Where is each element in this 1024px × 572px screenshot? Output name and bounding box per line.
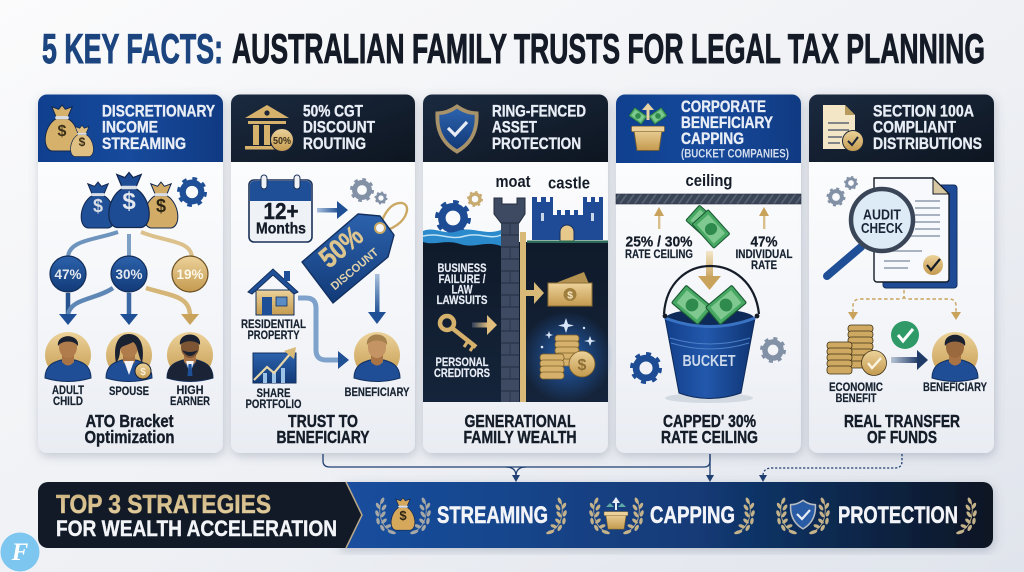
text: personal creditors: CREDITORS xyxy=(434,366,490,380)
icon: header money bags xyxy=(45,105,93,157)
icon: shield xyxy=(437,106,477,152)
text: 25% / 30% rate ceiling xyxy=(625,234,693,261)
icon: share portfolio chart xyxy=(253,347,296,383)
text: 25% / 30% rate ceiling: RATE CEILING xyxy=(625,247,693,261)
label: economic benefit: ECONOMIC xyxy=(829,380,883,394)
rate badge: 19% xyxy=(172,256,208,292)
panel: section 100A compliant distributions xyxy=(809,94,994,453)
rate badge: 47%: 47% xyxy=(54,266,82,282)
icon: 50% discount tag: 50% xyxy=(313,220,369,274)
heading: discretionary income streaming xyxy=(102,102,216,153)
logo badge: F xyxy=(11,539,29,566)
ceiling bar xyxy=(616,194,801,204)
arrow: key to wall xyxy=(472,315,497,335)
arrow: benefit to beneficiary xyxy=(891,350,928,370)
caption xyxy=(464,411,576,447)
icon: gears xyxy=(828,177,857,205)
labels: moat and castle: castle xyxy=(548,174,590,192)
icon: gold banknote: $ xyxy=(567,290,573,302)
label: economic benefit xyxy=(829,380,883,405)
icon: pot with money xyxy=(629,103,667,150)
heading: corporate beneficiary capping xyxy=(681,97,789,160)
caption: Optimization xyxy=(84,427,174,447)
label: residential property xyxy=(241,317,306,342)
caption: OF FUNDS xyxy=(867,427,937,447)
title: 5 KEY FACTS: xyxy=(42,25,223,72)
flow arrows from rates to people xyxy=(59,288,199,325)
icon: gears xyxy=(632,339,784,382)
arrow: property to beneficiary xyxy=(298,298,349,369)
water: moat xyxy=(423,230,501,246)
icon: header money bags: $ xyxy=(79,135,86,149)
text: 47% individual rate: RATE xyxy=(751,258,777,272)
label: ceiling: ceiling xyxy=(686,171,732,190)
icon: residential property house xyxy=(248,269,298,315)
heading: 50% CGT discount routing: ROUTING xyxy=(303,134,366,153)
rate badge: 30% xyxy=(111,256,147,292)
strategy: protection: PROTECTION xyxy=(838,502,958,529)
heading: section 100A compliant distributions xyxy=(873,102,982,153)
icon: calendar 12+ months: Months xyxy=(256,220,306,238)
labels: people: CHILD xyxy=(53,394,83,408)
text: 47% individual rate: INDIVIDUAL xyxy=(736,247,792,261)
labels: people: ADULT xyxy=(52,383,85,397)
connector lines to banner xyxy=(323,454,902,482)
heading: 50% CGT discount routing xyxy=(303,102,375,153)
rate badge: 19%: 19% xyxy=(176,266,204,282)
icon: spouse: $ xyxy=(140,367,146,378)
caption: BENEFICIARY xyxy=(276,427,370,447)
strategy: capping xyxy=(588,497,756,535)
caption: TRUST TO xyxy=(288,411,358,431)
icon: 50% discount tag: DISCOUNT xyxy=(329,246,381,293)
heading: ring-fenced asset protection: ASSET xyxy=(492,118,537,136)
icon: gold coin stacks: $ xyxy=(578,357,587,374)
labels: people: SPOUSE xyxy=(109,384,149,398)
icon: calendar 12+ months: 12+ xyxy=(264,198,298,224)
arrow: tag to beneficiary xyxy=(368,274,386,324)
rate badge: 30%: 30% xyxy=(116,266,143,282)
heading: ring-fenced asset protection: PROTECTION xyxy=(492,134,581,153)
heading: corporate beneficiary capping: BENEFICIARY xyxy=(681,113,774,132)
label: beneficiary: BENEFICIARY xyxy=(923,380,987,394)
text: 47% individual rate xyxy=(736,234,792,272)
text: 47% individual rate: 47% xyxy=(750,234,778,250)
banner: top 3 strategies xyxy=(38,482,993,548)
arrow: money into bucket xyxy=(698,251,721,290)
text: personal creditors: PERSONAL xyxy=(436,355,488,369)
banner heading: TOP 3 STRATEGIES xyxy=(56,489,271,519)
icon: audit documents xyxy=(874,178,957,288)
caption: RATE CEILING xyxy=(661,427,758,447)
icon: coin stacks xyxy=(827,325,886,376)
text: 25% / 30% rate ceiling: 25% / 30% xyxy=(626,234,692,250)
label: residential property: RESIDENTIAL xyxy=(241,317,306,331)
icon: magnifying glass audit check: CHECK xyxy=(861,221,903,237)
arrow: calendar to tag xyxy=(317,201,348,219)
caption: GENERATIONAL xyxy=(464,411,576,431)
label: beneficiary: BENEFICIARY xyxy=(344,385,410,399)
flow arrows from bags to rates xyxy=(68,232,192,258)
labels: moat and castle: moat xyxy=(496,172,531,191)
logo badge xyxy=(0,532,40,572)
text: business failure xyxy=(436,261,488,307)
icon: green check xyxy=(891,321,919,349)
icon: gold banknote xyxy=(548,272,592,306)
text: business failure: LAW xyxy=(452,282,473,296)
caption: CAPPED' 30% xyxy=(663,411,756,431)
icon: falling banknotes xyxy=(686,205,730,248)
labels: people xyxy=(52,383,210,408)
icon: bucket: BUCKET xyxy=(682,353,736,370)
heading: ring-fenced asset protection: RING-FENCED xyxy=(492,102,586,120)
icon: gears xyxy=(352,180,387,204)
icon: key xyxy=(440,316,476,351)
caption xyxy=(276,411,370,447)
icon: gear xyxy=(179,179,205,205)
icon: spouse xyxy=(106,332,152,382)
icon: three money bags: $ xyxy=(122,188,136,215)
icon: adult child xyxy=(45,332,91,382)
heading: discretionary income streaming: STREAMING xyxy=(102,134,186,153)
text: business failure: FAILURE / xyxy=(438,272,486,286)
gold barrier and arrow xyxy=(520,232,544,402)
caption: REAL TRANSFER xyxy=(844,411,960,431)
caption xyxy=(661,411,758,447)
arrow: individual rate xyxy=(759,207,769,229)
heading: discretionary income streaming: INCOME xyxy=(102,118,158,136)
heading: section 100A compliant distributions: COMPLIANT xyxy=(873,118,957,136)
text: business failure: BUSINESS xyxy=(438,261,486,275)
icon: magnifying glass audit check xyxy=(827,189,913,276)
icon: three money bags: $ xyxy=(93,196,103,216)
labels: people: HIGH xyxy=(176,383,204,397)
heading: corporate beneficiary capping: CORPORATE xyxy=(681,97,766,116)
text: business failure: LAWSUITS xyxy=(436,293,488,307)
heading: corporate beneficiary capping: CAPPING xyxy=(681,129,744,148)
icon: sparkles xyxy=(541,318,596,348)
icon: 50% discount tag xyxy=(302,203,407,303)
panel: corporate beneficiary capping xyxy=(616,94,801,453)
heading: ring-fenced asset protection xyxy=(492,102,586,153)
strategy: streaming: $ xyxy=(399,508,407,523)
icon: beneficiary xyxy=(354,332,400,382)
caption: FAMILY WEALTH xyxy=(464,427,576,447)
banner heading xyxy=(56,489,337,541)
icon: header money bags: $ xyxy=(58,123,67,140)
label: share portfolio: PORTFOLIO xyxy=(246,397,302,411)
rate badge: 47% xyxy=(50,256,86,292)
heading: 50% CGT discount routing: 50% CGT xyxy=(303,102,363,120)
icon: beneficiary xyxy=(932,332,978,382)
heading: 50% CGT discount routing: DISCOUNT xyxy=(303,118,375,136)
icon: tower wall xyxy=(494,198,525,402)
icon: three money bags xyxy=(81,172,178,228)
caption xyxy=(84,411,174,447)
icon: high earner xyxy=(167,332,213,382)
strategy: streaming: STREAMING xyxy=(437,502,548,529)
icon: calendar 12+ months xyxy=(249,175,312,242)
icon: gears xyxy=(438,192,482,233)
caption xyxy=(844,411,960,447)
labels: people: EARNER xyxy=(170,394,210,408)
icon: three money bags: $ xyxy=(156,196,166,216)
icon: castle xyxy=(527,197,608,243)
heading: section 100A compliant distributions: DISTRIBUTIONS xyxy=(873,134,982,153)
banner heading: FOR WEALTH ACCELERATION xyxy=(56,516,337,541)
caption: ATO Bracket xyxy=(86,411,174,431)
label: share portfolio: SHARE xyxy=(256,386,290,400)
panel: 50% CGT discount routing xyxy=(231,94,415,453)
icon: magnifying glass audit check: AUDIT xyxy=(863,208,901,224)
label: residential property: PROPERTY xyxy=(248,328,300,342)
panel: discretionary income streaming xyxy=(38,94,223,453)
icon: bucket xyxy=(663,266,759,403)
labels: moat and castle xyxy=(496,172,590,192)
icon: document with check xyxy=(823,105,864,152)
icon: bank with 50% coin xyxy=(245,105,294,152)
arrow: rate ceiling xyxy=(654,207,664,229)
label: economic benefit: BENEFIT xyxy=(836,391,877,405)
label: share portfolio xyxy=(246,386,302,411)
glow behind coins xyxy=(521,311,613,403)
heading: section 100A compliant distributions: SECTION 100A xyxy=(873,102,974,120)
heading: discretionary income streaming: DISCRETIONARY xyxy=(102,102,216,120)
strategy: streaming xyxy=(374,497,568,535)
heading: corporate beneficiary capping: (BUCKET COMPANIES) xyxy=(681,148,789,160)
icon: gold coin stacks xyxy=(540,335,595,379)
dark vault panel xyxy=(423,242,608,402)
icon: bank with 50% coin: 50% xyxy=(273,136,291,147)
dashed split arrows xyxy=(848,290,961,320)
strategy: capping: CAPPING xyxy=(650,502,735,529)
text: personal creditors xyxy=(434,355,490,380)
panel: ring-fenced asset protection xyxy=(423,94,613,453)
strategy: protection xyxy=(775,497,978,535)
